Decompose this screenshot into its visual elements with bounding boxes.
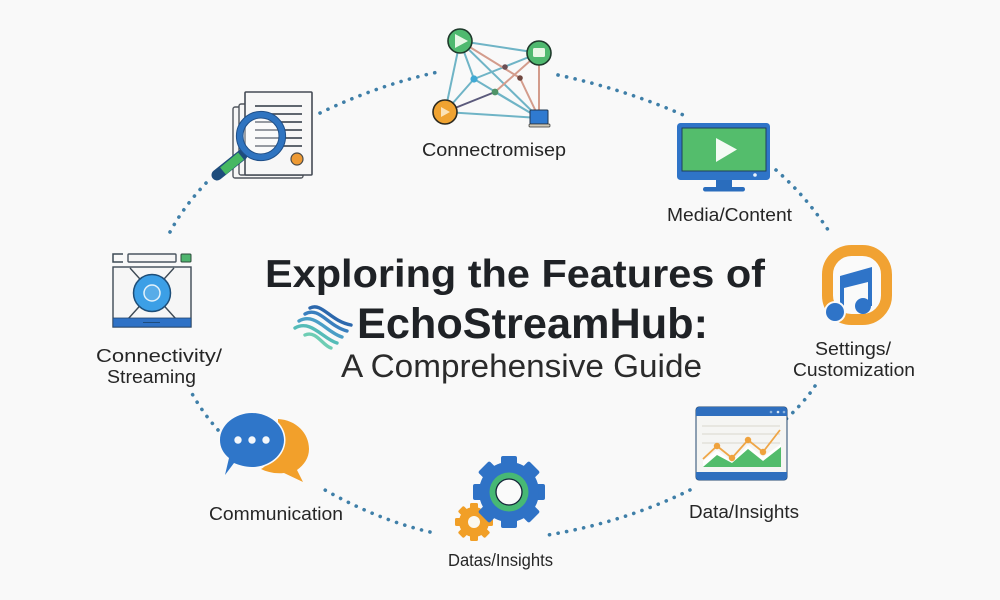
icon: network diagram [433,29,551,127]
label: Settings/ Customization: Settings/ [815,339,891,359]
icon: monitor with play button [677,123,770,192]
label: Media/Content: Media/Content [667,205,792,225]
label: Datas/Insights (bottom): Datas/Insights [448,550,553,570]
title: A Comprehensive Guide [341,348,702,384]
label: Settings/ Customization: Customization [793,360,915,380]
label: Connectromisep: Connectromisep [422,139,566,160]
label: Connectivity/ Streaming [96,345,223,387]
icon: EchoStreamHub wave logo [295,307,351,348]
label: Connectivity/ Streaming: Connectivity/ [96,345,223,366]
icon: gears [455,454,547,541]
icon: music note app [824,250,886,323]
label: Settings/ Customization [793,339,915,380]
title [265,253,766,384]
dotted ring connecting the features [170,72,832,535]
title: Exploring the Features of [265,253,766,296]
icon: line chart window [696,407,787,480]
label: Data/Insights (right): Data/Insights [689,502,799,522]
label: Communication: Communication [209,503,343,524]
label: Connectivity/ Streaming: Streaming [107,366,196,387]
title: EchoStreamHub: [357,300,708,348]
icon: chat bubbles [218,412,309,482]
icon: document with magnifying glass [217,92,312,178]
icon: connectivity window [113,254,191,327]
